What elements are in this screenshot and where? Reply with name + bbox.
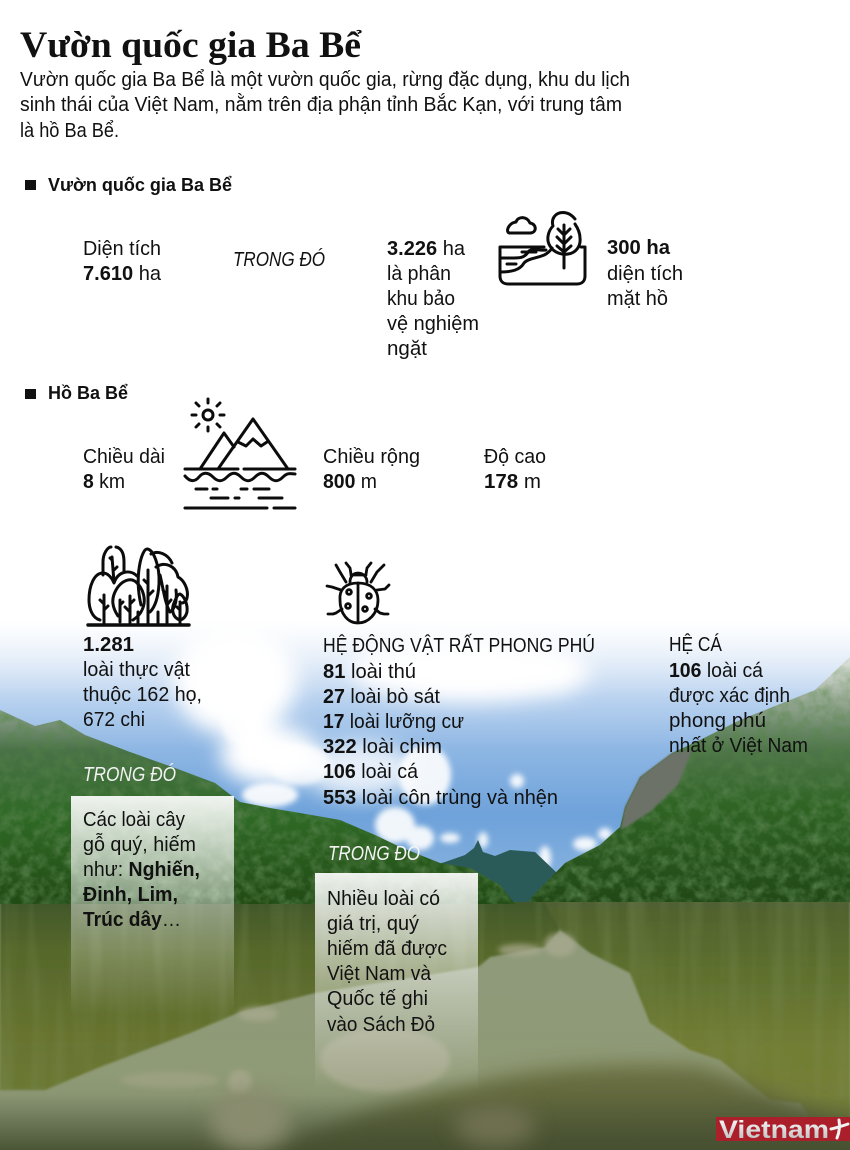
text: red book species: Nhiều loài có — [327, 888, 440, 910]
text: red book species: Quốc tế ghi — [327, 988, 428, 1010]
stat: strict protection: là phân — [387, 263, 451, 285]
section heading: Vườn quốc gia Ba Bể: Vườn quốc gia Ba Bể — [48, 175, 232, 195]
text: red book species: Việt Nam và — [327, 963, 432, 985]
stat: lake surface — [607, 237, 683, 310]
block: fish: 106 loài cá — [669, 660, 764, 682]
block: fauna: 106 loài cá — [323, 761, 419, 783]
block: fauna: 17 loài lưỡng cư — [323, 711, 464, 733]
icon: ladybug — [327, 563, 389, 623]
stat: lake surface: diện tích — [607, 263, 683, 285]
text: rare trees: Trúc dây… — [83, 909, 181, 931]
stat: elevation — [484, 446, 546, 493]
left mountain — [0, 710, 515, 904]
stat: length: Chiều dài — [83, 446, 165, 468]
stat: width — [323, 446, 420, 493]
title: Vườn quốc gia Ba Bể — [20, 25, 363, 66]
stat: length — [83, 446, 165, 493]
block: fish: HỆ CÁ — [669, 633, 723, 656]
block: fish: được xác định — [669, 685, 790, 707]
block: fish: nhất ở Việt Nam — [669, 735, 808, 757]
stat: strict protection: ngặt — [387, 338, 427, 360]
text: red book species: vào Sách Đỏ — [327, 1014, 435, 1036]
stat: strict protection — [387, 238, 479, 360]
text: rare trees: gỗ quý, hiếm — [83, 833, 196, 856]
translucent panel left — [71, 796, 234, 1014]
right mountain — [530, 657, 850, 902]
stat: area — [83, 238, 162, 285]
lake foreground shadow — [270, 1065, 850, 1150]
block: fish — [669, 633, 808, 757]
stat: lake surface: mặt hồ — [607, 288, 668, 310]
lower cloud reflection — [210, 1090, 290, 1150]
label: trong đó fauna: TRONG ĐÓ — [328, 842, 420, 865]
label: trong đó flora: TRONG ĐÓ — [83, 763, 176, 786]
text: rare trees: Đinh, Lim, — [83, 884, 178, 906]
text: rare trees: Các loài cây — [83, 809, 185, 831]
stat: strict protection: vệ nghiệm — [387, 313, 479, 335]
block: flora: 672 chi — [83, 709, 145, 731]
block: fauna: 81 loài thú — [323, 661, 416, 683]
white fade — [0, 0, 850, 621]
stat: elevation: 178 m — [484, 471, 541, 493]
stat: length: 8 km — [83, 471, 125, 493]
stat: lake surface: 300 ha — [607, 237, 671, 259]
stat: area: 7.610 ha — [83, 263, 162, 285]
intro text — [20, 69, 630, 142]
stat: area: Diện tích — [83, 238, 161, 260]
section heading: Hồ Ba Bể: Hồ Ba Bể — [48, 383, 128, 403]
block: flora: thuộc 162 họ, — [83, 684, 202, 706]
logo: Vietnam+: Vietnam — [719, 1116, 829, 1144]
stat: width: Chiều rộng — [323, 446, 420, 468]
block: fauna: 322 loài chim — [323, 736, 442, 758]
translucent panel centre — [315, 873, 478, 1091]
text: red book species: hiếm đã được — [327, 938, 447, 960]
block: fauna: 27 loài bò sát — [323, 686, 440, 708]
label: trong đó: TRONG ĐÓ — [233, 248, 325, 271]
intro text: là hồ Ba Bể. — [20, 120, 119, 142]
icon: sun, mountains, water — [185, 399, 295, 508]
stat: elevation: Độ cao — [484, 446, 546, 468]
block: fauna — [323, 634, 595, 809]
text: red book species: giá trị, quý — [327, 913, 419, 935]
lake — [0, 895, 850, 1150]
stat: strict protection: 3.226 ha — [387, 238, 466, 260]
intro text: sinh thái của Việt Nam, nằm trên địa phận tỉnh Bắc Kạn, với trung tâm — [20, 93, 622, 116]
block: fish: phong phú — [669, 710, 766, 732]
block: fauna: 553 loài côn trùng và nhện — [323, 787, 558, 809]
text: rare trees — [83, 809, 200, 931]
block: flora — [83, 634, 202, 731]
block: flora: loài thực vật — [83, 659, 190, 681]
intro text: Vườn quốc gia Ba Bể là một vườn quốc gia, rừng đặc dụng, khu du lịch — [20, 69, 630, 91]
block: flora: 1.281 — [83, 634, 134, 656]
centre peak — [420, 840, 556, 902]
block: fauna: HỆ ĐỘNG VẬT RẤT PHONG PHÚ — [323, 634, 595, 657]
icon: forest — [88, 547, 189, 625]
stat: strict protection: khu bảo — [387, 288, 455, 310]
text: rare trees: như: Nghiến, — [83, 859, 200, 881]
stat: width: 800 m — [323, 471, 377, 493]
clouds — [173, 625, 590, 798]
lake cloud reflections — [120, 933, 576, 1094]
icon: tree and lake — [500, 212, 585, 284]
text: red book species — [327, 888, 447, 1036]
